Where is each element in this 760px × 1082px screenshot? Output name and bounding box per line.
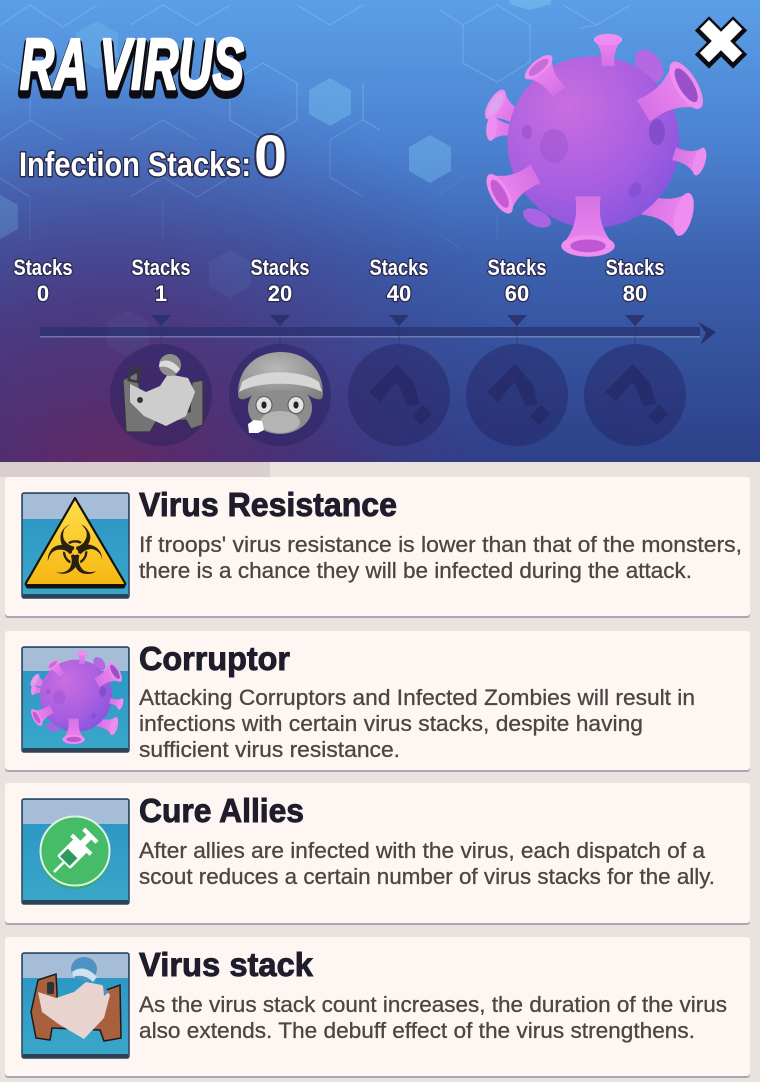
icon: corruptor virus	[22, 647, 129, 752]
description: As the virus stack count increases, the duration of the virus	[139, 992, 727, 1017]
description: also extends. The debuff effect of the virus strengthens.	[139, 1018, 695, 1043]
list panel background	[0, 462, 760, 1082]
heading: Cure Allies	[139, 792, 304, 829]
description: Attacking Corruptors and Infected Zombies will result in	[139, 685, 695, 710]
timeline labels: Stacks	[488, 255, 546, 280]
filled hexagons	[0, 0, 551, 358]
title: RA VIRUS	[20, 30, 244, 110]
timeline labels: 80	[623, 281, 647, 306]
description: sufficient virus resistance.	[139, 737, 400, 762]
description	[139, 532, 742, 583]
heading: Virus stack	[139, 946, 314, 983]
icon: grey infected soldier on bed	[123, 354, 203, 432]
icon: green syringe	[22, 799, 129, 904]
timeline markers	[151, 315, 645, 346]
icon: infected soldier on bed	[22, 953, 129, 1058]
panel: corruptor	[5, 631, 750, 772]
infection stacks counter: 0	[254, 124, 287, 189]
timeline labels: Stacks	[606, 255, 664, 280]
description	[139, 992, 727, 1043]
icon: purple virus	[481, 34, 709, 257]
description	[139, 838, 715, 889]
infection stacks counter: Infection Stacks:	[19, 146, 251, 184]
timeline labels: 1	[155, 281, 167, 306]
timeline labels: Stacks	[132, 255, 190, 280]
description: If troops' virus resistance is lower than that of the monsters,	[139, 532, 742, 557]
heading: Corruptor	[139, 640, 290, 677]
icon: biohazard warning sign	[22, 493, 129, 598]
description: infections with certain virus stacks, despite having	[139, 711, 643, 736]
description	[139, 685, 695, 762]
title: RA VIRUS	[20, 25, 244, 105]
hexagon background pattern	[0, 5, 630, 250]
panel: virus stack	[5, 937, 750, 1078]
icon: biohazard warning sign: ☣	[45, 512, 105, 591]
timeline labels: 60	[505, 281, 529, 306]
timeline labels: 20	[268, 281, 292, 306]
description: there is a chance they will be infected during the attack.	[139, 558, 692, 583]
timeline arrow	[40, 322, 716, 345]
panel: cure allies	[5, 783, 750, 925]
timeline labels: Stacks	[14, 255, 72, 280]
heading: Virus Resistance	[139, 486, 397, 523]
timeline labels: 0	[37, 281, 49, 306]
panel: virus resistance	[5, 477, 750, 618]
header background	[0, 0, 760, 464]
timeline labels: Stacks	[250, 255, 310, 280]
icon: close button	[709, 29, 733, 54]
reward circles	[110, 344, 686, 446]
icon: grey soldier head	[238, 352, 323, 434]
infection stacks counter	[19, 124, 287, 189]
timeline labels: Stacks	[370, 255, 428, 280]
icon: locked rewards	[369, 364, 668, 425]
timeline labels	[14, 255, 664, 306]
timeline labels: 40	[387, 281, 411, 306]
title	[20, 25, 244, 110]
description: scout reduces a certain number of virus stacks for the ally.	[139, 864, 715, 889]
description: After allies are infected with the virus, each dispatch of a	[139, 838, 705, 863]
